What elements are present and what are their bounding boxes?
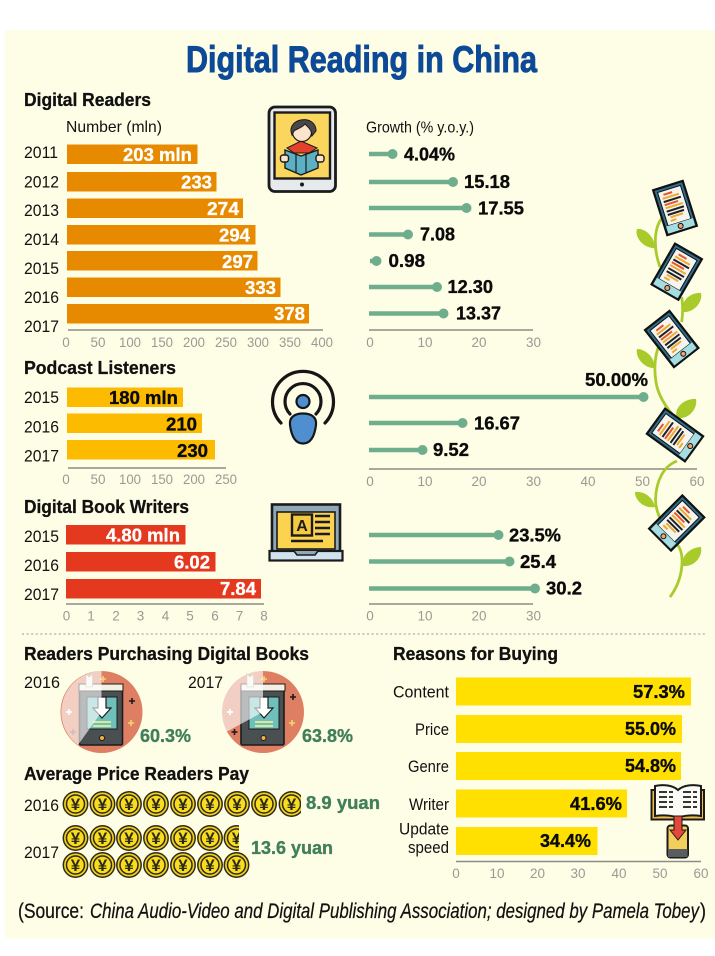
bar values: 203 mln: [123, 144, 192, 165]
axis: [452, 862, 708, 881]
axis: 2: [112, 608, 120, 624]
bar values: [123, 144, 305, 324]
bar values: 7.84: [220, 578, 257, 599]
axis: 0: [62, 472, 70, 487]
bar values: 6.02: [174, 552, 210, 572]
category labels: Price: [415, 721, 449, 739]
category labels: [393, 684, 449, 857]
year labels: 2015: [24, 260, 59, 278]
panel: reasons for buying: [393, 644, 708, 881]
panel: podcast growth chart: [366, 369, 704, 489]
axis: 6: [211, 608, 219, 624]
category labels: Genre: [408, 758, 449, 776]
growth values: 12.30: [448, 276, 493, 297]
year labels: 2017: [24, 448, 59, 466]
red bars: [66, 525, 261, 598]
value 60.3%: 60.3%: [140, 725, 191, 746]
value 8.9 yuan: 8.9 yuan: [306, 792, 380, 813]
year labels: 2016: [24, 418, 59, 436]
bar values: 180 mln: [109, 387, 178, 408]
axis: 10: [418, 608, 432, 624]
axis: 3: [137, 608, 144, 624]
axis: 20: [530, 866, 545, 881]
category labels: Content: [393, 684, 449, 702]
axis: [62, 468, 237, 487]
category labels: Update: [399, 820, 449, 838]
axis: 5: [186, 608, 194, 624]
bar values: 34.4%: [540, 830, 591, 851]
bar values: 294: [219, 224, 251, 246]
axis: 10: [490, 866, 504, 881]
axis: 20: [472, 335, 486, 350]
axis: 8: [260, 608, 268, 624]
axis: 50: [90, 472, 106, 487]
value 13.6 yuan: 13.6 yuan: [251, 837, 333, 858]
bar values: 41.6%: [570, 793, 622, 814]
axis: 50: [90, 335, 106, 350]
axis title: number: Number (mln): [66, 119, 162, 136]
year labels: 2015: [24, 528, 59, 546]
icon: book downloading to phone: [652, 785, 704, 858]
axis: 200: [183, 335, 205, 350]
bar values: 210: [166, 414, 197, 434]
growth values: 50.00%: [585, 369, 648, 390]
bar values: 54.8%: [625, 755, 676, 776]
axis: [366, 469, 704, 489]
growth values: 17.55: [478, 198, 524, 218]
axis: 1: [87, 608, 95, 624]
year label 2016: 2016: [24, 674, 60, 692]
axis: 40: [612, 866, 626, 881]
heading: podcast listeners: Podcast Listeners: [24, 358, 176, 378]
source line: (Source:: [18, 900, 84, 923]
axis: 150: [151, 335, 173, 350]
axis: 0: [366, 474, 374, 489]
growth values: 4.04%: [404, 144, 455, 164]
orange bars: [67, 144, 309, 324]
axis: [366, 330, 541, 350]
year labels: 2013: [24, 202, 59, 220]
icon: podcast: [272, 371, 334, 444]
growth values: 0.98: [388, 250, 425, 271]
growth values: 16.67: [474, 412, 520, 434]
heading: reasons for buying: Reasons for Buying: [393, 644, 558, 664]
growth lollipops: [369, 530, 540, 594]
axis: [366, 604, 541, 624]
year label 2017: 2017: [188, 674, 223, 692]
axis title: growth: Growth (% y.o.y.): [366, 120, 474, 136]
icon: laptop: A: [296, 518, 308, 535]
bar values: 233: [181, 172, 212, 192]
coins 2017 bottom row: [63, 853, 249, 877]
axis: 60: [694, 866, 708, 881]
bar values: 4.80 mln: [106, 524, 180, 546]
panel: readers purchasing digital books: [24, 644, 353, 753]
panel: writers growth chart: [366, 524, 582, 624]
axis: 4: [162, 608, 170, 624]
axis: 10: [418, 474, 432, 489]
year label 2017: 2017: [24, 844, 59, 862]
divider: [22, 633, 707, 635]
bar values: 274: [207, 198, 240, 219]
year labels: 2015: [24, 389, 59, 407]
axis: 0: [452, 866, 460, 881]
illustration: vine with tablets: [635, 181, 704, 597]
year labels: 2014: [24, 231, 59, 249]
axis: 250: [215, 472, 237, 487]
value 63.8%: 63.8%: [302, 725, 353, 746]
year labels: 2017: [24, 586, 59, 604]
axis: [62, 330, 333, 350]
year labels: 2012: [24, 174, 59, 192]
bar values: [106, 524, 257, 599]
year labels: [24, 389, 59, 466]
axis: 10: [418, 335, 432, 350]
heading: digital book writers: Digital Book Writers: [24, 497, 189, 517]
axis: 150: [151, 472, 173, 487]
axis: 7: [236, 608, 243, 624]
growth lollipops: [369, 149, 472, 318]
panel: digital readers number chart: [24, 90, 333, 350]
axis: 300: [247, 335, 269, 350]
axis: 0: [62, 335, 70, 350]
bar values: [540, 681, 685, 851]
axis: 0: [63, 608, 70, 624]
heading: digital readers: Digital Readers: [24, 90, 151, 110]
year labels: 2016: [24, 557, 59, 575]
yellow bars: [67, 388, 215, 460]
icon: laptop: [270, 504, 342, 560]
axis: 30: [570, 866, 586, 881]
axis: 100: [119, 472, 141, 487]
axis: 20: [472, 474, 486, 489]
yellow bars: [456, 678, 691, 855]
heading: readers purchasing: Readers Purchasing Digital Books: [24, 644, 309, 664]
bar values: [109, 387, 208, 461]
axis: 30: [526, 608, 541, 624]
bar values: 57.3%: [633, 681, 685, 702]
title: Digital Reading in China: [186, 39, 537, 80]
axis: 60: [690, 474, 704, 489]
coins 2016: [63, 792, 304, 816]
panel: average price readers pay: [24, 764, 380, 877]
year labels: [24, 144, 59, 336]
panel: digital readers growth chart: [366, 120, 541, 350]
year labels: 2017: [24, 318, 59, 336]
year labels: 2011: [24, 144, 58, 162]
axis: 0: [366, 608, 374, 624]
axis: 350: [279, 335, 301, 350]
growth values: 9.52: [433, 439, 469, 460]
axis: 40: [580, 474, 596, 489]
category labels: Writer: [409, 796, 449, 814]
growth lollipops: [369, 392, 648, 455]
bar values: 230: [177, 440, 208, 461]
axis: 0: [366, 335, 374, 350]
pie icon 2016: [60, 671, 142, 753]
axis: 30: [526, 474, 541, 489]
axis: 30: [526, 335, 541, 350]
panel: digital book writers chart: [24, 497, 268, 624]
growth values: [509, 524, 582, 598]
year labels: 2016: [24, 289, 59, 307]
year labels: [24, 528, 59, 604]
growth values: 25.4: [520, 551, 557, 572]
growth values: 30.2: [546, 578, 582, 598]
growth values: 7.08: [420, 224, 455, 244]
axis: [63, 604, 268, 624]
axis: 50: [652, 866, 668, 881]
growth values: 15.18: [464, 171, 510, 192]
axis: 20: [472, 608, 486, 624]
bar values: 378: [274, 303, 305, 324]
pie icon 2017: [221, 671, 304, 753]
heading: average price: Average Price Readers Pay: [24, 764, 249, 784]
growth values: [433, 369, 648, 460]
bar values: 333: [245, 277, 276, 298]
axis: 100: [119, 335, 141, 350]
bar values: 55.0%: [625, 718, 676, 739]
bar values: 297: [222, 251, 253, 272]
panel: podcast listeners chart: [24, 358, 237, 487]
axis: 250: [215, 335, 237, 350]
growth values: 23.5%: [509, 524, 561, 546]
source line: ): [700, 900, 706, 923]
category labels: speed: [408, 839, 449, 857]
coins 2017 top row: [63, 826, 249, 850]
growth values: [388, 144, 524, 324]
axis: 200: [183, 472, 205, 487]
growth values: 13.37: [456, 302, 501, 324]
icon: child reading on tablet: [269, 107, 336, 192]
axis: 400: [311, 335, 333, 350]
axis: 50: [635, 474, 650, 489]
year label 2016: 2016: [24, 797, 59, 815]
